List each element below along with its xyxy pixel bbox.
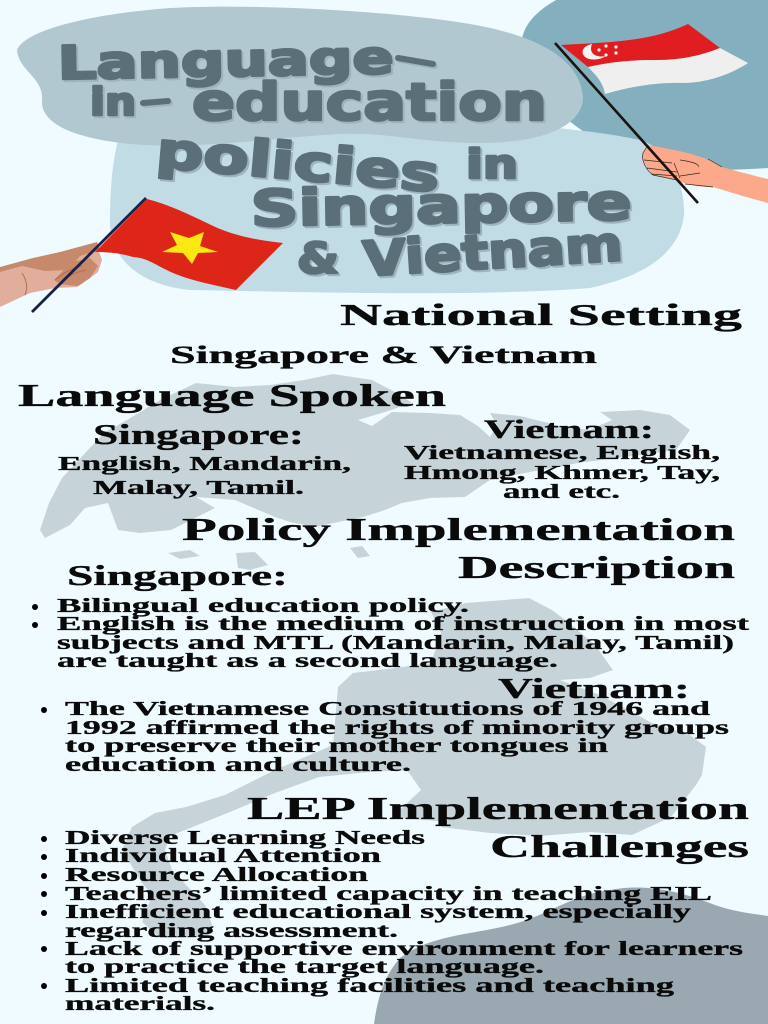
title backdrop: pale blue blob — [110, 121, 684, 293]
bullet list: Vietnam policy: The Vietnamese Constitutions of 1946 and — [65, 698, 711, 720]
bullet list: challenges: Resource Allocation — [65, 864, 369, 886]
text block: Vietnam languages: Hmong, Khmer, Tay, — [404, 462, 720, 484]
bullet list: challenges: regarding assessment. — [65, 920, 398, 942]
bullet list: Vietnam policy: education and culture. — [65, 754, 411, 776]
decorative circle: top right — [521, 0, 768, 170]
title: Language — [57, 30, 394, 90]
illustration: hand holding Singapore flag — [555, 24, 768, 203]
heading: LEP Implementation Challenges — [247, 790, 749, 864]
heading: Language Spoken: Language Spoken — [18, 377, 446, 413]
title backdrop: grey blob — [17, 7, 583, 146]
heading: LEP Implementation Challenges: LEP Implementation — [247, 790, 749, 826]
bullet list: Singapore policy: subjects and MTL (Mandarin, Malay, Tamil) — [57, 632, 734, 654]
title: in — [90, 80, 136, 124]
bullet list: challenges: to practice the target language. — [65, 956, 544, 978]
decorative blob: bottom right corner — [374, 888, 768, 1024]
background map: Singapore silhouette — [40, 374, 690, 570]
subheading: Singapore: Singapore: — [67, 560, 288, 592]
title: in — [466, 142, 518, 188]
background map: Vietnam silhouette — [122, 598, 706, 938]
bullet list: Vietnam policy: 1992 affirmed the rights of minority groups — [65, 717, 729, 739]
title: education — [192, 73, 547, 133]
bullet list: challenges: materials. — [65, 993, 215, 1015]
heading: Singapore & Vietnam: Singapore & Vietnam — [170, 342, 597, 369]
illustration: hand holding Vietnam flag — [0, 198, 283, 312]
bullet list: Singapore policy: Bilingual education policy. — [57, 595, 469, 617]
text block: Vietnam languages: Vietnamese, English, — [404, 442, 720, 464]
heading: Policy Implementation Description: Description — [458, 549, 735, 585]
text block: Vietnam languages — [404, 415, 720, 503]
bullet list: challenges — [41, 827, 743, 1015]
bullet list: Vietnam policy — [41, 698, 729, 776]
title: Singapore — [250, 173, 632, 238]
bullet list: challenges: Teachers’ limited capacity in teaching EIL — [65, 883, 712, 905]
title: & — [297, 234, 339, 283]
subheading: Vietnam: Vietnam: — [498, 673, 690, 705]
bullet list: challenges: Individual Attention — [65, 845, 382, 867]
bullet list: challenges: Diverse Learning Needs — [65, 827, 425, 849]
title: policies — [154, 121, 442, 204]
heading: LEP Implementation Challenges: Challenges — [490, 828, 749, 864]
text block: Singapore languages: Singapore: — [93, 419, 304, 451]
bullet list: Vietnam policy: to preserve their mother tongues in — [65, 735, 609, 757]
bullet list: Singapore policy: English is the medium of instruction in most — [57, 613, 749, 635]
bullet list: challenges: Inefficient educational system, especially — [65, 901, 692, 923]
text block: Vietnam languages: Vietnam: — [484, 415, 654, 444]
heading: Policy Implementation Description — [182, 511, 735, 585]
bullet list: challenges: Limited teaching facilities and teaching — [65, 975, 675, 997]
text block: Vietnam languages: and etc. — [503, 481, 620, 503]
bullet list: Singapore policy: are taught as a second language. — [57, 650, 558, 672]
bullet list: Singapore policy — [32, 595, 749, 672]
text block: Singapore languages — [58, 419, 351, 499]
heading: Policy Implementation Description: Policy Implementation — [182, 511, 735, 547]
text block: Singapore languages: English, Mandarin, — [58, 453, 351, 475]
bullet list: challenges: Lack of supportive environment for learners — [65, 938, 743, 960]
title — [57, 30, 632, 288]
title: Vietnam — [361, 216, 624, 288]
text block: Singapore languages: Malay, Tamil. — [93, 477, 304, 499]
heading: National Setting: National Setting — [340, 297, 743, 332]
